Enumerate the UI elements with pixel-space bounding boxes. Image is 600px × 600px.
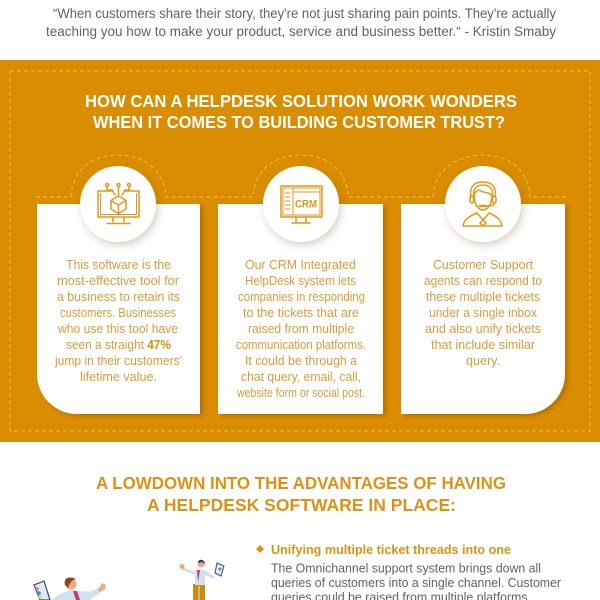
heading: helpdesk trust: HOW CAN A HELPDESK SOLUTION WORK WONDERS (85, 91, 517, 111)
card 1 text: who use this tool have (57, 321, 178, 336)
advantage heading: Unifying multiple ticket threads into one (271, 542, 511, 557)
card 2 text: HelpDesk system lets (245, 273, 356, 288)
card 1 text: customers. Businesses (60, 305, 176, 320)
card 3 text: query. (466, 353, 500, 368)
quote: teaching you how to make your product, service and business better.“ - Kristin Smaby (46, 24, 556, 39)
card 1 text: This software is the (66, 257, 171, 272)
card 3 text (424, 257, 542, 368)
advantage item: unifying ticket threads (256, 542, 562, 600)
card 2 text: It could be through a (245, 353, 358, 368)
card 1 text: a business to retain its (57, 289, 180, 304)
card 2 text: chat query, email, call, (241, 369, 361, 384)
icon: customer support agent (445, 166, 521, 242)
card 2 text: Our CRM Integrated (245, 257, 356, 272)
card 2 text: raised from multiple (248, 321, 354, 336)
quote (46, 6, 556, 39)
icon: software cube on monitor (80, 166, 156, 242)
card 1 text (54, 257, 182, 384)
quote: “When customers share their story, they're not just sharing pain points. They're actually (53, 6, 556, 21)
card 3 text: that include similar (431, 337, 536, 352)
illustration: person with tablet, left (34, 577, 106, 600)
card 1 text: seen a straight 47% (66, 337, 171, 352)
heading: helpdesk trust: WHEN IT COMES TO BUILDING CUSTOMER TRUST? (93, 112, 505, 132)
advantage body text: queries of customers into a single channel. Customer (271, 575, 562, 590)
card 2 text: companies in responding (238, 289, 365, 304)
card 2 text: communication platforms. (236, 337, 366, 352)
panel: helpdesk trust band (0, 60, 600, 442)
heading: advantages: A HELPDESK SOFTWARE IN PLACE: (147, 495, 456, 515)
heading: advantages: A LOWDOWN INTO THE ADVANTAGES OF HAVING (96, 473, 506, 493)
heading: advantages (96, 473, 506, 515)
card 1 text: most-effective tool for (57, 273, 180, 288)
card 3 text: these multiple tickets (426, 289, 540, 304)
card 1 (37, 204, 200, 414)
card 3 text: under a single inbox (429, 305, 537, 320)
card 2 text: to the tickets that are (243, 305, 359, 320)
card 3 text: and also unify tickets (425, 321, 541, 336)
card 2 text: website form or social post. (236, 385, 365, 400)
card 3 (401, 204, 565, 414)
illustration: person with tablet, right (180, 560, 224, 600)
icon: CRM window on monitor: CRM (295, 198, 317, 210)
card 3 text: agents can respond to (424, 273, 542, 288)
card 2 text (236, 257, 366, 400)
card 2 (218, 204, 383, 414)
advantage body text (271, 560, 562, 600)
card 3 text: Customer Support (433, 257, 533, 272)
card 1 text: jump in their customers' (54, 353, 182, 368)
card 1 text: lifetime value. (80, 369, 157, 384)
icon: CRM window on monitor (263, 166, 339, 242)
advantage body text: The Omnichannel support system brings down all (271, 560, 541, 576)
icon: bullet diamond (256, 545, 264, 553)
heading: helpdesk trust (85, 91, 517, 132)
